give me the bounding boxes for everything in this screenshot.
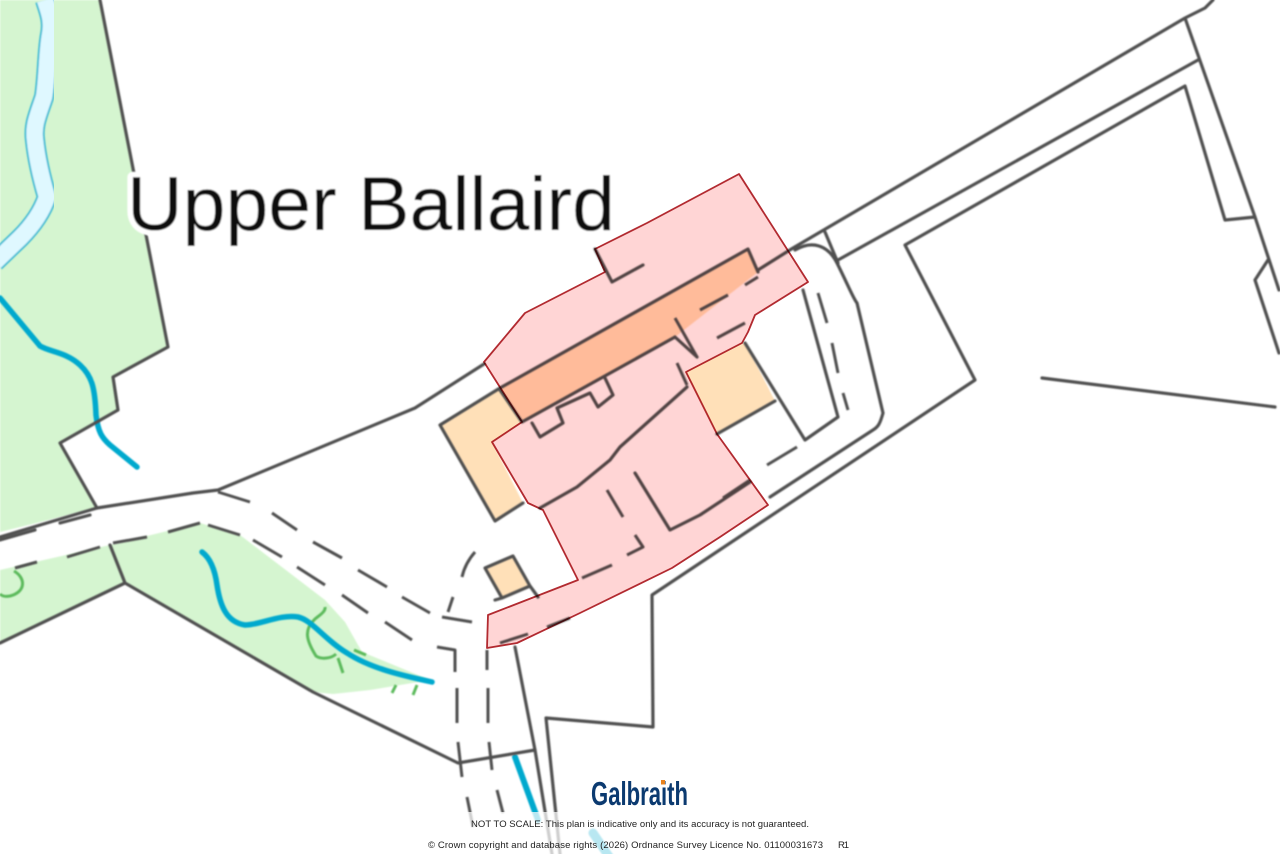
tree symbols [0, 571, 417, 695]
river [0, 0, 51, 262]
disclaimer text: NOT TO SCALE: This plan is indicative only and its accuracy is not guaranteed. [471, 819, 809, 830]
logo: Galbraith: Galbraith [591, 775, 688, 812]
copyright text: © Crown copyright and database rights (2026) Ordnance Survey Licence No. 01100031673 [428, 840, 823, 851]
footer backdrop [428, 812, 852, 854]
pink site boundary [484, 174, 808, 648]
buildings [440, 249, 775, 598]
woodland areas [0, 0, 430, 694]
place name label: Upper Ballaird [127, 162, 615, 247]
revision label: R1 [838, 840, 849, 851]
logo: Galbraith [591, 775, 688, 812]
streams [0, 298, 610, 854]
